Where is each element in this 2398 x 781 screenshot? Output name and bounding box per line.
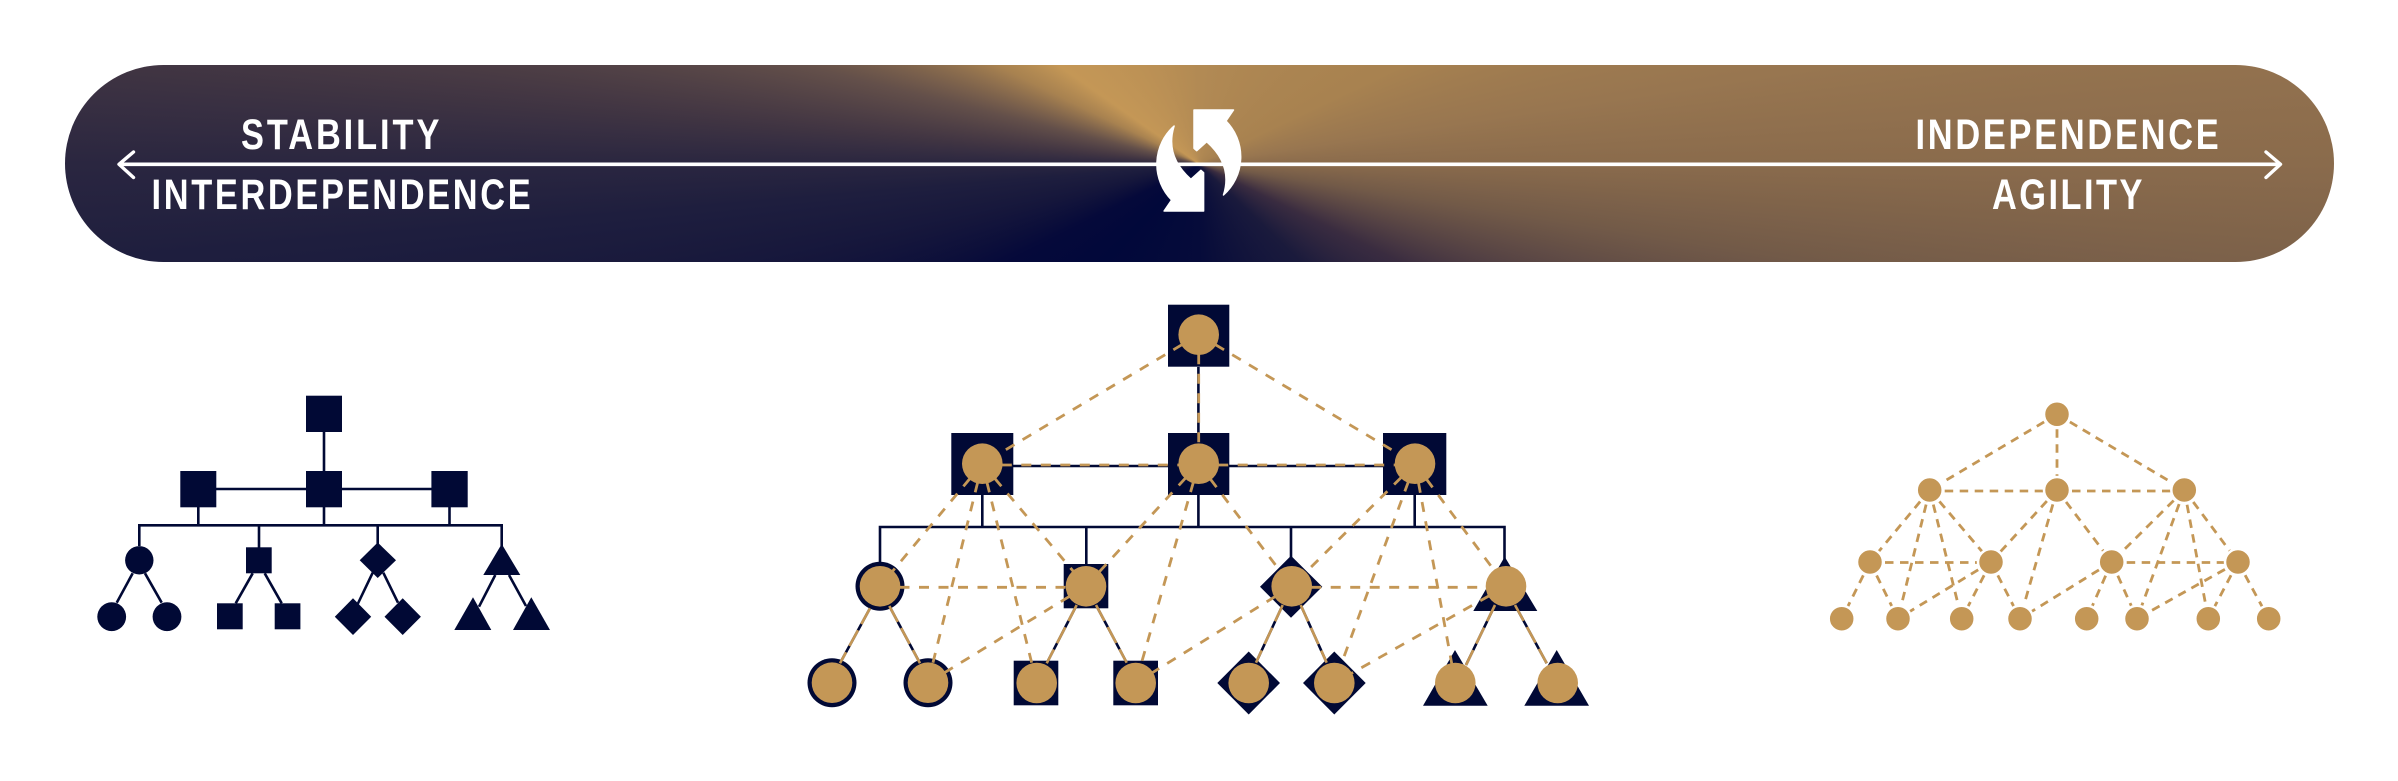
- connector lines: [117, 432, 526, 607]
- label: agility: AGILITY: [1992, 171, 2142, 219]
- label: independence: INDEPENDENCE: [1916, 111, 2219, 159]
- label: stability: STABILITY: [241, 111, 439, 159]
- icon: refresh cycle arrows: [1157, 110, 1241, 211]
- double-headed arrow: [119, 152, 2280, 178]
- navy connector lines: [840, 367, 1547, 665]
- diagram: traditional hierarchy (navy): [97, 396, 550, 635]
- navy nodes: [97, 396, 550, 635]
- diagram: independent network (gold): [1829, 401, 2282, 632]
- dashed links: [1842, 414, 2269, 619]
- gold dashed network links: [880, 335, 1506, 683]
- gold circles: [812, 314, 1578, 703]
- gold nodes: [1829, 401, 2282, 632]
- gradient spectrum bar: [65, 65, 2334, 262]
- diagram: hybrid hierarchy and network: [808, 305, 1589, 714]
- label: interdependence: INTERDEPENDENCE: [152, 171, 531, 219]
- navy shapes: [808, 305, 1589, 714]
- gold dashes over navy child links: [840, 605, 1547, 665]
